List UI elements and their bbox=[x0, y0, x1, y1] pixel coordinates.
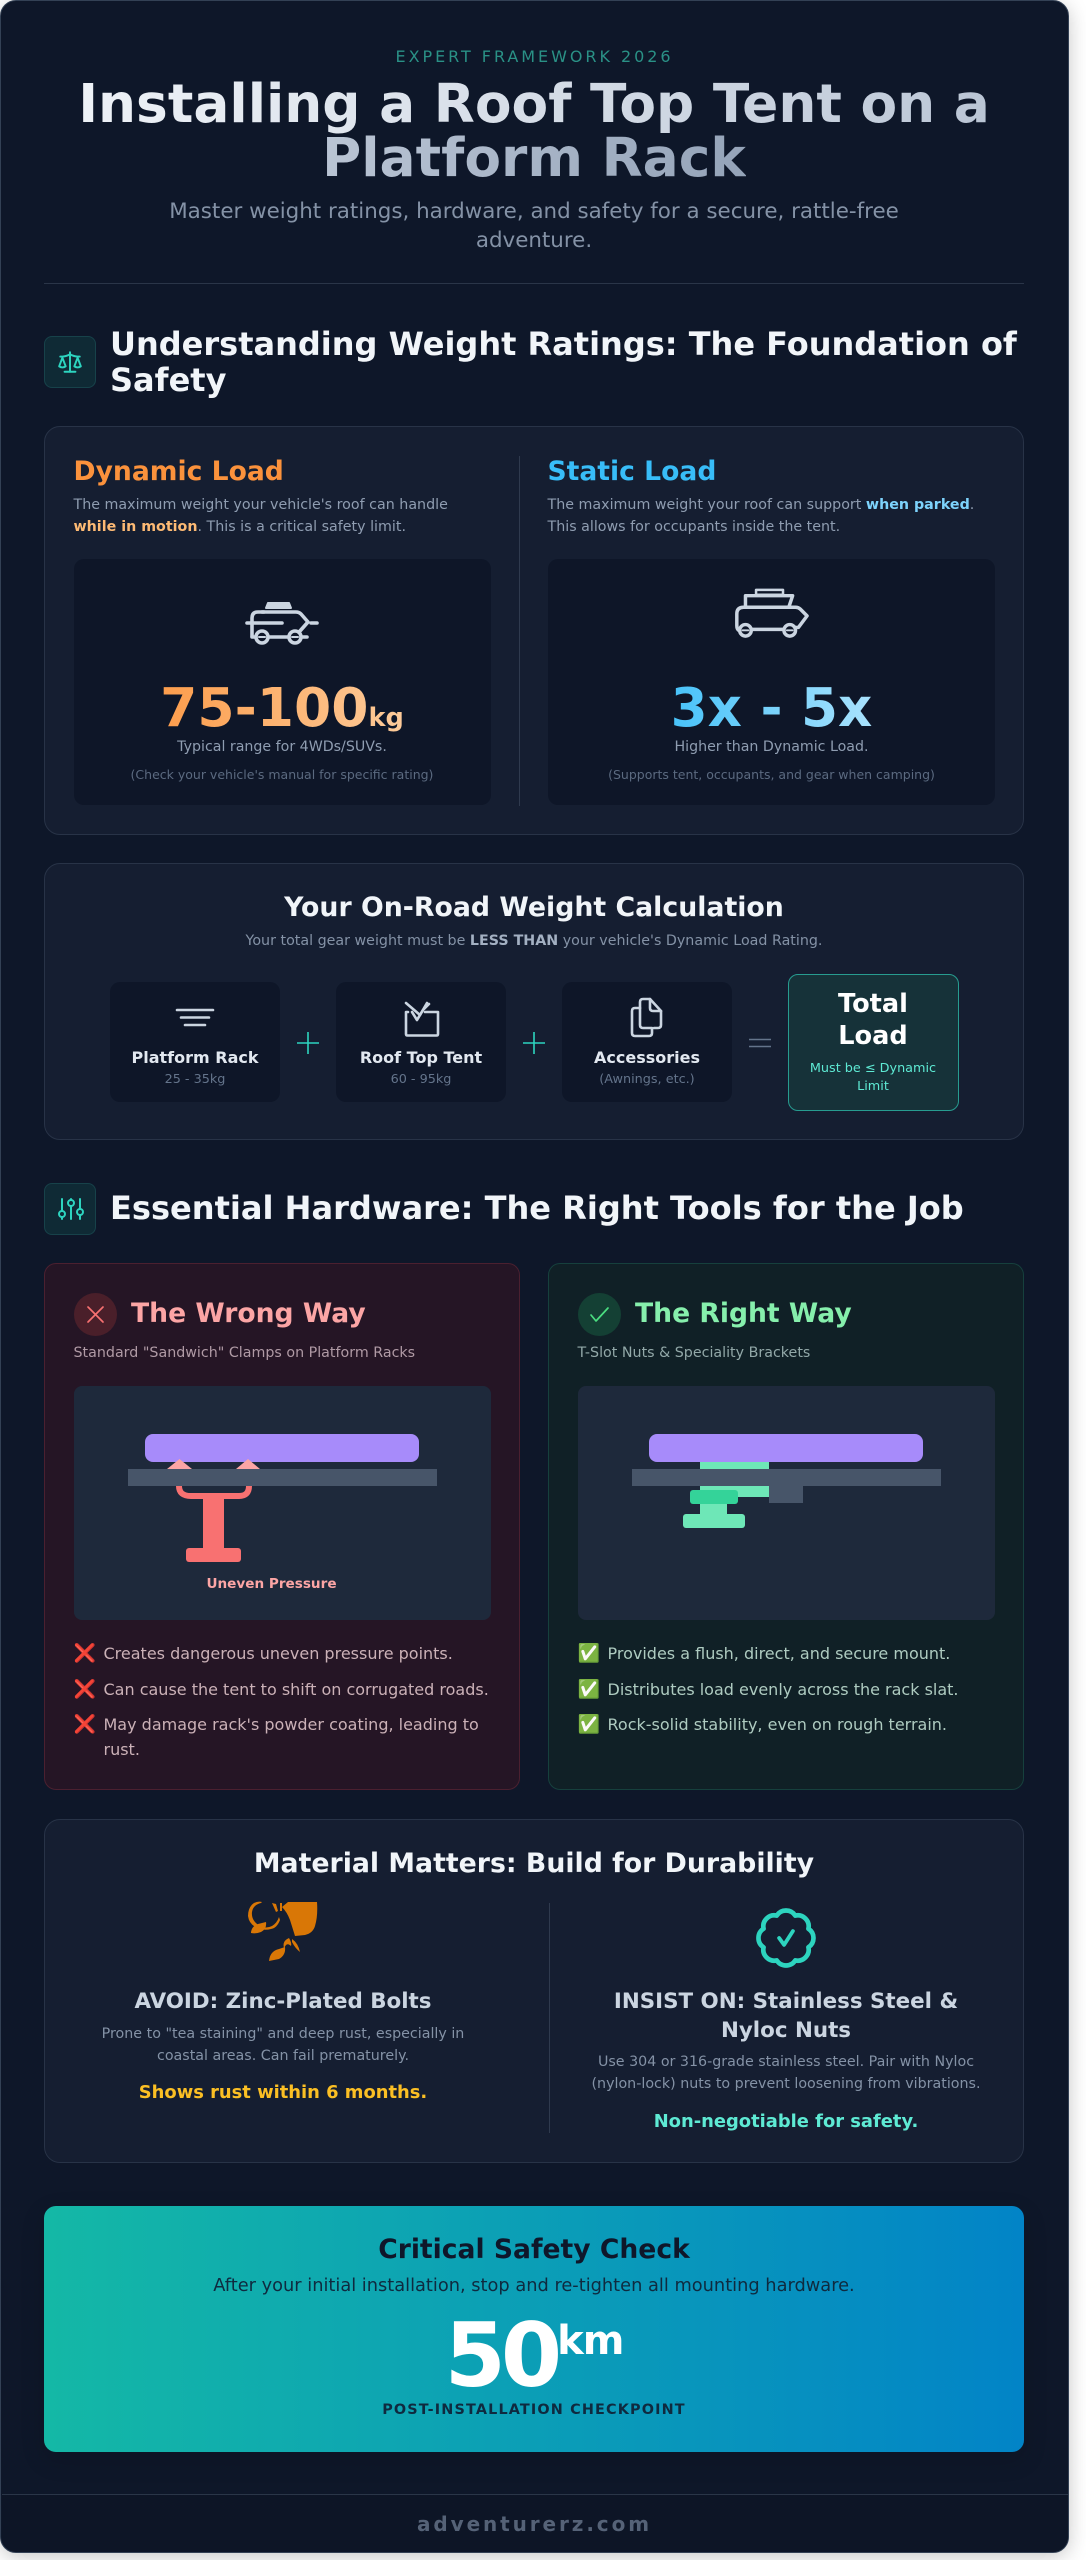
static load description bbox=[547, 497, 974, 534]
avoid description: coastal areas. Can fail prematurely. bbox=[157, 2048, 409, 2064]
wrong way list: May damage rack's powder coating, leading to bbox=[104, 1715, 479, 1734]
banner label: POST-INSTALLATION CHECKPOINT bbox=[382, 2402, 686, 2418]
card: total load bbox=[788, 974, 959, 1111]
calculation subheading: Your total gear weight must be LESS THAN your vehicle's Dynamic Load Rating. bbox=[246, 933, 822, 949]
subtitle bbox=[169, 199, 899, 253]
total load text: Total bbox=[838, 989, 908, 1019]
stat note: (Check your vehicle's manual for specific rating) bbox=[131, 767, 433, 782]
total load text bbox=[838, 989, 908, 1051]
dynamic load description: The maximum weight your vehicle's roof can handle bbox=[74, 497, 448, 513]
section heading: weight ratings: Understanding Weight Ratings: The Foundation of bbox=[110, 325, 1017, 363]
section heading: hardware: Essential Hardware: The Right Tools for the Job bbox=[110, 1189, 964, 1227]
total load note: Limit bbox=[857, 1079, 889, 1094]
static load description: The maximum weight your roof can support when parked. bbox=[548, 497, 974, 513]
equals sign bbox=[749, 1038, 771, 1048]
footer domain: adventurerz.com bbox=[417, 2512, 652, 2536]
subtitle: Master weight ratings, hardware, and safety for a secure, rattle-free bbox=[169, 199, 899, 224]
icon: check bbox=[578, 1293, 620, 1336]
insist heading: INSIST ON: Stainless Steel & bbox=[614, 1989, 958, 2014]
footer bbox=[2, 2494, 1068, 2552]
icon: badge check bbox=[756, 1908, 816, 1968]
static load description: This allows for occupants inside the tent. bbox=[548, 518, 840, 534]
wrong way heading: The Wrong Way bbox=[131, 1298, 366, 1329]
wrong way list bbox=[74, 1643, 489, 1759]
wrong way list: Creates dangerous uneven pressure points. bbox=[104, 1644, 453, 1663]
weight range: 60 - 95kg bbox=[391, 1072, 451, 1087]
panel: material matters bbox=[44, 1819, 1024, 2163]
subtitle: adventure. bbox=[476, 228, 592, 253]
dynamic load description bbox=[73, 497, 448, 534]
banner: critical safety check bbox=[44, 2206, 1024, 2452]
label: Accessories bbox=[594, 1048, 700, 1067]
wrong way list: Can cause the tent to shift on corrugated roads. bbox=[104, 1680, 489, 1698]
icon: cross bbox=[74, 1293, 116, 1336]
stat: 75-100 kg: 75-100kg bbox=[160, 676, 404, 739]
diagram: clamp bbox=[74, 1386, 490, 1620]
section heading: weight ratings bbox=[110, 325, 1018, 399]
right way list: ✅ bbox=[578, 1643, 600, 1664]
icon: tent bbox=[404, 1002, 440, 1037]
insist callout: Non-negotiable for safety. bbox=[654, 2111, 918, 2132]
card: accessories bbox=[562, 982, 732, 1102]
avoid description bbox=[102, 2026, 464, 2064]
banner heading: Critical Safety Check bbox=[378, 2234, 690, 2265]
main title: Installing a Roof Top Tent on a bbox=[78, 72, 990, 134]
card: platform rack bbox=[110, 982, 280, 1102]
label: Platform Rack bbox=[132, 1048, 258, 1067]
card: roof top tent bbox=[336, 982, 506, 1102]
calculation heading: Your On-Road Weight Calculation bbox=[284, 892, 784, 923]
panel: on-road weight calculation bbox=[44, 863, 1024, 1140]
total load text: Load bbox=[838, 1021, 908, 1051]
icon: vehicle with tent moving bbox=[245, 602, 319, 645]
label: Roof Top Tent bbox=[360, 1048, 482, 1067]
insist heading: Nyloc Nuts bbox=[721, 2018, 851, 2042]
stat: 50 km: 50km bbox=[445, 2304, 623, 2407]
insist heading bbox=[614, 1989, 958, 2042]
note: (Awnings, etc.) bbox=[599, 1072, 695, 1087]
icon: sliders bbox=[44, 1183, 96, 1235]
stat note: (Supports tent, occupants, and gear when camping) bbox=[608, 767, 935, 782]
plus sign bbox=[523, 1032, 545, 1054]
right way list: Rock-solid stability, even on rough terrain. bbox=[608, 1715, 947, 1734]
wrong way list: rust. bbox=[104, 1740, 140, 1759]
banner text: After your initial installation, stop and re-tighten all mounting hardware. bbox=[213, 2275, 855, 2296]
right way list: ✅ bbox=[578, 1678, 600, 1700]
icon: documents bbox=[630, 998, 662, 1038]
dynamic load heading: Dynamic Load bbox=[74, 456, 284, 487]
wrong way list: ❌ bbox=[74, 1714, 96, 1735]
right way subheading: T-Slot Nuts & Speciality Brackets bbox=[578, 1345, 810, 1361]
panel: the right way bbox=[548, 1263, 1024, 1790]
right way list bbox=[578, 1643, 959, 1735]
stat caption: Typical range for 4WDs/SUVs. bbox=[177, 739, 387, 755]
diagram: t-slot bbox=[578, 1386, 994, 1620]
insist description: Use 304 or 316-grade stainless steel. Pair with Nyloc bbox=[598, 2054, 974, 2070]
right way list: ✅ bbox=[578, 1714, 600, 1735]
icon: vehicle with tent parked bbox=[735, 588, 809, 638]
section heading: weight ratings: Safety bbox=[110, 361, 226, 399]
stat box: dynamic load bbox=[74, 559, 490, 805]
insist description bbox=[591, 2054, 981, 2092]
diagram label: Uneven Pressure bbox=[206, 1576, 337, 1592]
main title bbox=[78, 72, 990, 188]
right way heading: The Right Way bbox=[635, 1298, 852, 1329]
avoid callout: Shows rust within 6 months. bbox=[139, 2082, 427, 2103]
stat box: static load bbox=[548, 559, 995, 805]
wrong way list: ❌ bbox=[74, 1643, 96, 1664]
total load note: Must be ≤ Dynamic bbox=[810, 1061, 936, 1076]
material heading: Material Matters: Build for Durability bbox=[254, 1848, 814, 1879]
icon: scales bbox=[44, 336, 96, 388]
weight range: 25 - 35kg bbox=[165, 1072, 225, 1087]
dynamic load description: while in motion. This is a critical safety limit. bbox=[74, 518, 406, 534]
panel: weight ratings bbox=[44, 426, 1024, 835]
avoid description: Prone to "tea staining" and deep rust, especially in bbox=[102, 2026, 464, 2042]
right way list: Provides a flush, direct, and secure mount. bbox=[608, 1644, 950, 1663]
panel: the wrong way bbox=[44, 1263, 520, 1790]
wrong way subheading: Standard "Sandwich" Clamps on Platform Racks bbox=[74, 1345, 415, 1361]
main title: Platform Rack bbox=[322, 126, 746, 188]
stat: 3x - 5x: 3x - 5x bbox=[671, 677, 872, 739]
icon: rack lines bbox=[176, 1008, 214, 1026]
wrong way list: ❌ bbox=[74, 1678, 96, 1700]
icon: rusted bolt bbox=[248, 1902, 318, 1961]
plus sign bbox=[297, 1032, 319, 1054]
total load note bbox=[810, 1061, 936, 1094]
insist description: (nylon-lock) nuts to prevent loosening from vibrations. bbox=[591, 2076, 981, 2092]
right way list: Distributes load evenly across the rack slat. bbox=[608, 1680, 959, 1698]
stat caption: Higher than Dynamic Load. bbox=[674, 739, 869, 755]
header eyebrow: EXPERT FRAMEWORK 2026 bbox=[396, 47, 673, 66]
avoid heading: AVOID: Zinc-Plated Bolts bbox=[134, 1989, 432, 2014]
static load heading: Static Load bbox=[548, 456, 716, 487]
